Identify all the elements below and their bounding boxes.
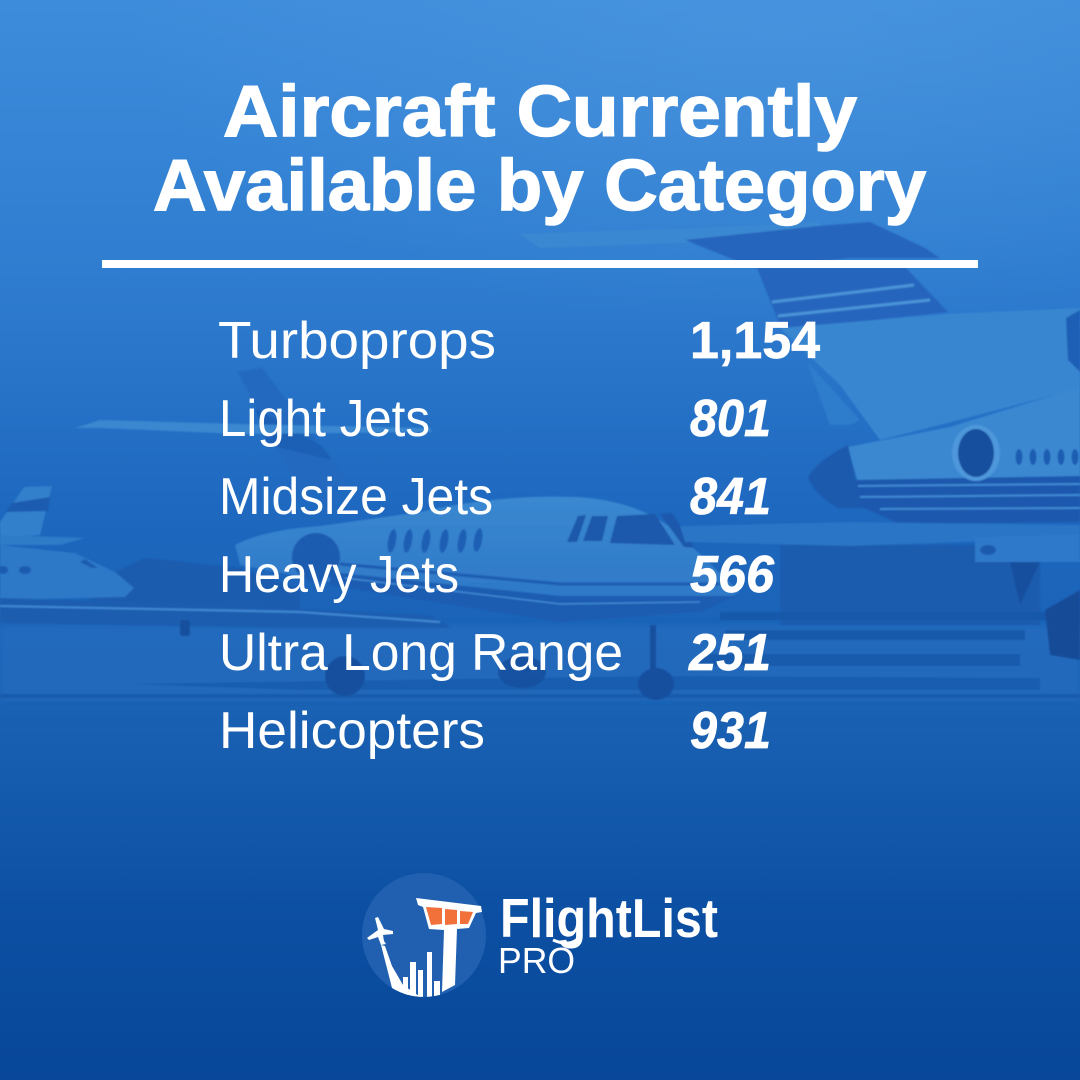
large right jet: wing and lower body <box>680 522 1080 660</box>
background photo: airport scene with parked jets <box>0 222 1080 978</box>
tree line <box>90 545 1040 625</box>
middle jet tail and stabilizer <box>75 368 432 492</box>
category table <box>218 312 820 760</box>
large right jet: horizontal stabilizer <box>520 222 830 248</box>
title: Aircraft Currently <box>223 72 857 152</box>
row: Turboprops <box>218 312 820 370</box>
logo: FlightList Pro <box>362 873 718 1002</box>
middle jet cockpit <box>567 513 695 548</box>
title <box>153 72 926 226</box>
right jet windows <box>1016 449 1078 465</box>
large right jet: tail fin <box>685 222 948 330</box>
icon: airplane with climbing trail <box>367 917 420 997</box>
row: Heavy Jets: Heavy Jets <box>219 546 459 604</box>
row: Helicopters: 931 <box>690 702 771 760</box>
middle jet landing gear <box>180 620 674 700</box>
large right jet: engine and body <box>808 387 1080 524</box>
icon: control tower <box>416 898 482 992</box>
row: Midsize Jets: Midsize Jets <box>219 468 493 526</box>
title: Available by Category <box>153 146 926 226</box>
large right jet: rear fuselage <box>780 308 1080 440</box>
row: Light Jets: Light Jets <box>219 390 430 448</box>
row: Heavy Jets <box>219 546 775 604</box>
wing band across left side <box>0 598 452 628</box>
middle jet fuselage <box>235 497 740 622</box>
ground stripes <box>0 612 1080 978</box>
row: Ultra Long Range: Ultra Long Range <box>219 624 623 682</box>
row: Light Jets <box>219 390 771 448</box>
row: Helicopters: Helicopters <box>219 702 485 760</box>
divider <box>102 260 978 268</box>
left jet <box>0 486 134 600</box>
tower windows <box>426 907 473 925</box>
row: Turboprops: 1,154 <box>690 312 820 370</box>
row: Turboprops: Turboprops <box>218 312 496 370</box>
wordmark swoosh <box>553 936 580 943</box>
logo: FlightList Pro: PRO <box>498 940 575 981</box>
tarmac light band <box>0 625 1080 700</box>
wordmark: FlightList <box>500 887 718 949</box>
row: Midsize Jets: 841 <box>690 468 771 526</box>
row: Helicopters <box>219 702 771 760</box>
row: Ultra Long Range: 251 <box>688 624 771 682</box>
logo badge circle <box>362 873 486 997</box>
row: Heavy Jets: 566 <box>690 546 775 604</box>
row: Light Jets: 801 <box>690 390 771 448</box>
middle jet windows <box>386 527 484 554</box>
row: Midsize Jets <box>219 468 771 526</box>
icon: city bars <box>403 952 440 997</box>
